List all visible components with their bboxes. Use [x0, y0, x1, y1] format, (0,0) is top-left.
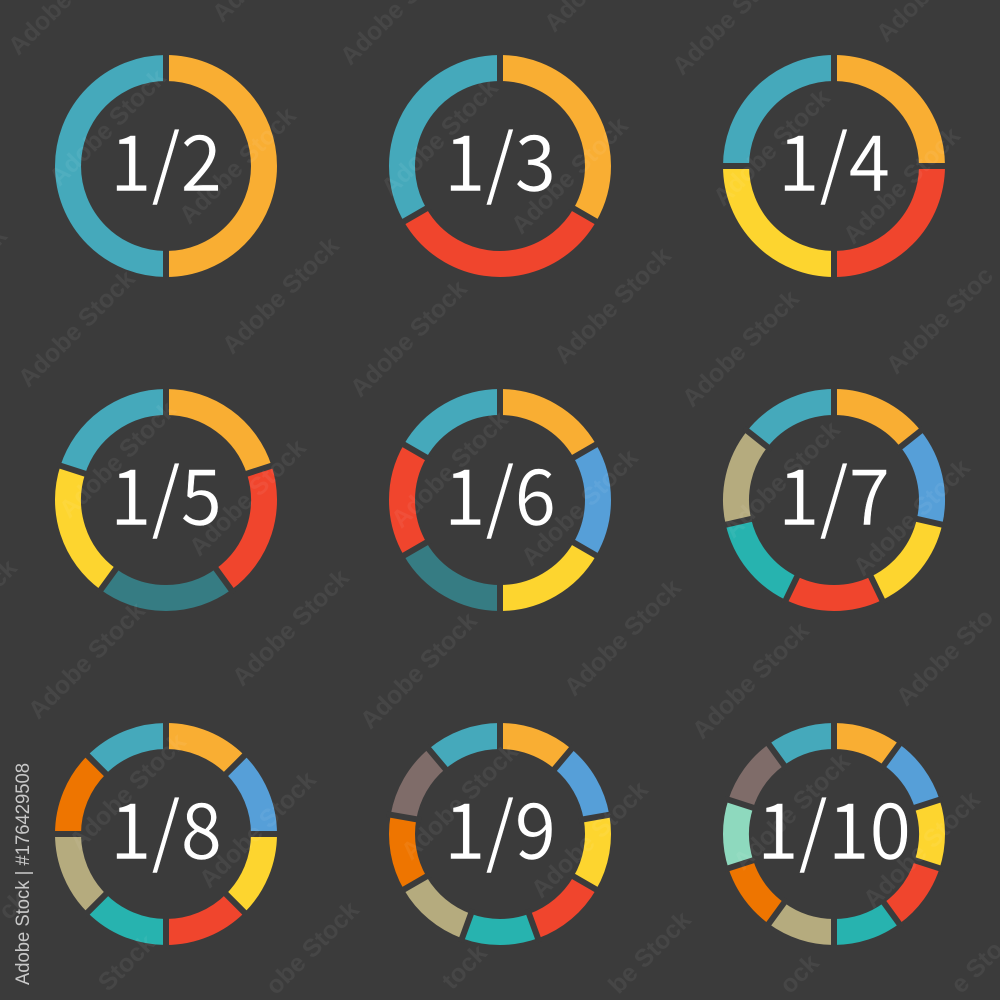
donut chart: 1/2 — [68, 51, 264, 281]
segment: red — [736, 68, 932, 264]
segment: orange — [402, 68, 598, 264]
segment: red — [711, 711, 957, 957]
watermarks: Adobe Stock: be Stock — [603, 906, 697, 999]
donut chart: 1/7 — [696, 362, 972, 638]
donut chart: 1/5 — [29, 363, 303, 637]
segment: orange — [68, 736, 264, 932]
watermarks: Adobe Stock: Adobe Stock — [718, 416, 846, 544]
segment: teal — [27, 695, 305, 973]
watermarks: Adobe Stock: Adobe Stock — [516, 444, 644, 572]
watermarks: Adobe Stock: Adobe Stock — [184, 434, 312, 562]
segment: dark teal — [29, 363, 303, 637]
segment: blue — [366, 366, 634, 634]
label: 1/2: 1/2 — [110, 102, 222, 214]
watermarks: Adobe Stock: Adobe Stock — [728, 748, 856, 876]
segment: red — [366, 366, 634, 634]
segment: blue — [696, 362, 972, 638]
watermarks: Adobe Stock: Adobe Stock — [858, 786, 986, 914]
watermarks: Adobe Stock: Adobe Stock — [23, 597, 151, 725]
donut chart: 1/4 — [719, 51, 949, 281]
segment: orange — [736, 68, 932, 264]
segment: mint — [711, 711, 957, 957]
watermarks: Adobe Stock: Adobe Stock — [559, 574, 687, 702]
segment: teal — [362, 696, 638, 972]
segment: dark teal — [402, 402, 598, 598]
segment: yellow — [29, 363, 303, 637]
segment: green teal — [68, 736, 264, 932]
segment: green teal — [374, 708, 626, 960]
segment: orange — [68, 68, 264, 264]
watermarks: Adobe Stock: Adobe Stock — [396, 738, 524, 866]
segment: green teal — [703, 369, 965, 631]
donut chart: 1/10 — [697, 697, 971, 971]
label: 1/8: 1/8 — [110, 770, 222, 882]
watermarks: Adobe Stock: Adobe Stock — [549, 242, 677, 370]
segment: yellow — [68, 736, 264, 932]
watermarks: Adobe Stock: Adobe Stock — [708, 84, 836, 212]
segment: orange — [402, 736, 598, 932]
segment: red — [703, 369, 965, 631]
segment: yellow — [386, 720, 614, 948]
watermarks: Adobe Stock: obe Stock — [260, 896, 365, 1000]
segment: teal — [366, 32, 634, 300]
watermarks: Adobe Stock: Adobe Stock — [174, 102, 302, 230]
segment: red — [366, 32, 634, 300]
watermarks: Adobe Stock: Adobe Stoc — [881, 262, 999, 380]
label: 1/5: 1/5 — [110, 436, 222, 548]
segment: blue — [27, 695, 305, 973]
label: 1/10: 1/10 — [757, 770, 911, 882]
watermarks: Adobe Stock: Adobe Stock — [848, 454, 976, 582]
label: 1/7: 1/7 — [778, 436, 890, 548]
segment: orange — [736, 402, 932, 598]
segment: blue — [362, 696, 638, 972]
label: 1/3: 1/3 — [444, 102, 556, 214]
watermarks: Adobe Stock: ock — [774, 949, 825, 999]
segment: teal — [697, 697, 971, 971]
watermarks: Adobe Stock: Adobe Stock — [345, 275, 473, 403]
segment: yellow — [711, 711, 957, 957]
label: 1/4: 1/4 — [778, 102, 890, 214]
donut chart: 1/3 — [366, 32, 634, 300]
segment: red — [366, 700, 634, 968]
segment: teal — [736, 68, 932, 264]
watermarks: Adobe Stock: Adobe Stock — [386, 406, 514, 534]
segment: teal — [68, 68, 264, 264]
segment: taupe — [711, 711, 957, 957]
segment: khaki — [717, 383, 951, 617]
watermarks: Adobe Stock: Adobe Stock — [838, 122, 966, 250]
segment: dark orange — [68, 736, 264, 932]
watermarks: Adobe Stock: Adobe Stock — [44, 64, 172, 192]
watermarks: Adobe Stock: Adobe Stock — [506, 112, 634, 240]
watermarks: Adobe Stock: Adobe Stock — [526, 776, 654, 904]
segment: red — [27, 695, 305, 973]
donut chart: 1/9 — [362, 696, 638, 972]
segment: blue — [697, 697, 971, 971]
segment: khaki — [27, 695, 305, 973]
segment: yellow — [366, 366, 634, 634]
watermarks: Adobe Stock: Adobe Stock — [54, 396, 182, 524]
watermarks: Adobe Stock: tock — [436, 939, 493, 995]
watermarks: Adobe Stock: Adobe Sto — [891, 603, 999, 712]
segment: taupe — [386, 720, 614, 948]
watermarks: Adobe Stock: Adobe Stock — [677, 285, 805, 413]
segment: dark orange — [366, 700, 634, 968]
segment: yellow — [736, 68, 932, 264]
donut chart: 1/8 — [27, 695, 305, 973]
watermarks: Adobe Stock: Stock — [93, 929, 161, 997]
watermarks: Adobe Stock: Adobe Stock — [13, 265, 141, 393]
watermarks: Adobe Stock: Adobe Stock — [687, 617, 815, 745]
segment: orange — [68, 402, 264, 598]
segment: orange — [736, 736, 932, 932]
watermarks: Adobe Stock: Adobe Stock — [64, 728, 192, 856]
watermarks: Adobe Stock: Adobe Stock — [376, 74, 504, 202]
segment: teal — [43, 377, 289, 623]
segment: red — [43, 377, 289, 623]
segment: dark orange — [697, 697, 971, 971]
watermarks: Adobe Stock: Adobe Stock — [227, 564, 355, 692]
watermarks: Adobe Stock: Adobe Stock — [194, 766, 322, 894]
label: 1/9: 1/9 — [444, 770, 556, 882]
watermarks: Adobe Stock: Adobe Stock — [217, 232, 345, 360]
segment: yellow — [717, 383, 951, 617]
vertical stock id caption: Adobe Stock | #176429508 — [13, 763, 34, 985]
segment: teal — [696, 362, 972, 638]
watermarks: Adobe Stock: Adobe Stock — [355, 607, 483, 735]
segment: orange — [402, 402, 598, 598]
segment: teal — [366, 366, 634, 634]
label: 1/6: 1/6 — [444, 436, 556, 548]
segment: khaki — [374, 708, 626, 960]
segment: khaki — [736, 736, 932, 932]
donut chart: 1/6 — [366, 366, 634, 634]
segment: green teal — [697, 697, 971, 971]
